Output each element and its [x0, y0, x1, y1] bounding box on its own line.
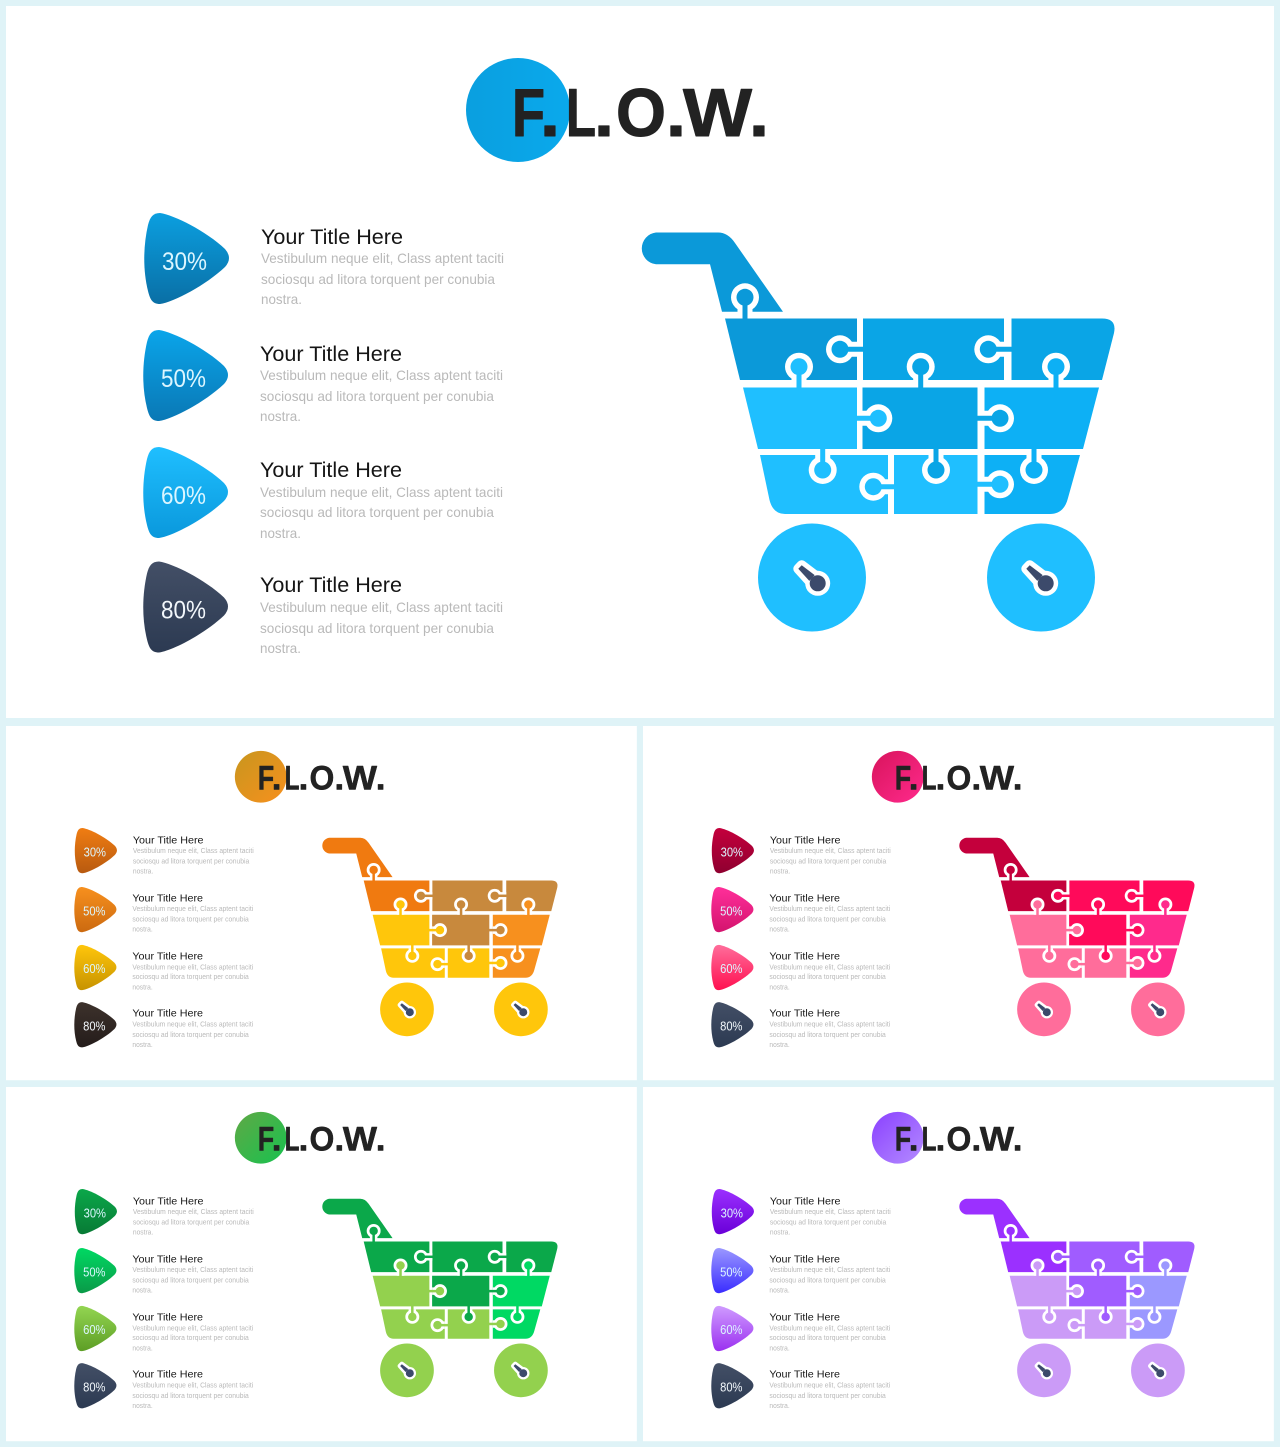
text block 4: sociosqu ad litora torquent per conubia — [769, 1032, 886, 1039]
badge 60% — [711, 1306, 753, 1351]
title: F.L.O.W.: . — [334, 760, 344, 798]
title: F.L.O.W.: W — [683, 75, 753, 151]
text block 2 — [132, 894, 254, 933]
title: F.L.O.W.: . — [376, 760, 386, 798]
list item 60% — [143, 447, 503, 541]
text block 3 — [769, 1312, 891, 1353]
text block 3: Your Title Here — [769, 951, 840, 962]
title: F.L.O.W.: . — [540, 75, 560, 151]
text block 1: Vestibulum neque elit, Class aptent taciti — [770, 1209, 891, 1216]
badge 30%: 30% — [84, 1206, 106, 1220]
title: F.L.O.W.: F — [512, 75, 545, 151]
badge 50% — [711, 887, 753, 932]
text block 4: Your Title Here — [260, 574, 402, 597]
text block 4: sociosqu ad litora torquent per conubia — [132, 1032, 249, 1039]
badge 50%: 50% — [720, 904, 743, 918]
title: F.L.O.W.: . — [936, 1121, 945, 1159]
title: F.L.O.W.: F — [895, 1121, 911, 1159]
title: F.L.O.W.: W — [343, 760, 377, 798]
badge 80% — [74, 1002, 116, 1047]
text block 1: sociosqu ad litora torquent per conubia — [261, 271, 495, 287]
text block 2: Your Title Here — [132, 1255, 203, 1266]
text block 4: Vestibulum neque elit, Class aptent taciti — [260, 599, 503, 615]
title: F.L.O.W.: W — [980, 760, 1014, 798]
text block 4: Vestibulum neque elit, Class aptent taciti — [132, 1382, 254, 1389]
badge 80% — [74, 1363, 116, 1408]
list item 30% — [144, 213, 504, 307]
text block 1: nostra. — [770, 868, 790, 875]
panel: blue main slide — [6, 6, 1274, 718]
text block 3: sociosqu ad litora torquent per conubia — [132, 974, 249, 981]
text block 4 — [769, 1370, 891, 1410]
text block 1 — [133, 1196, 254, 1236]
title: F.L.O.W.: . — [909, 760, 919, 798]
list item 80% — [143, 562, 503, 656]
text block 3: Your Title Here — [769, 1312, 840, 1323]
badge 30%: 30% — [721, 1206, 743, 1220]
text block 1: Your Title Here — [770, 835, 841, 846]
title: F.L.O.W.: . — [376, 1121, 386, 1159]
badge 80%: 80% — [83, 1380, 106, 1394]
text block 3: nostra. — [260, 525, 301, 541]
title: F.L.O.W.: . — [971, 1121, 981, 1159]
text block 2: Your Title Here — [260, 343, 402, 366]
title: F.L.O.W.: L — [285, 1121, 300, 1159]
title: F.L.O.W.: L — [566, 75, 596, 151]
text block 1: nostra. — [261, 291, 302, 307]
badge 80% — [143, 562, 228, 652]
text block 2: Vestibulum neque elit, Class aptent taciti — [260, 367, 503, 383]
text block 2: Vestibulum neque elit, Class aptent taciti — [769, 1267, 891, 1274]
text block 4: Your Title Here — [132, 1009, 203, 1020]
badge 50%: 50% — [161, 365, 206, 393]
text block 1: sociosqu ad litora torquent per conubia — [133, 858, 249, 865]
title: F.L.O.W.: F — [258, 760, 274, 798]
text block 4 — [132, 1009, 254, 1049]
title: F.L.O.W. — [872, 1112, 1023, 1164]
badge 50% — [711, 1248, 753, 1293]
title: F.L.O.W.: . — [299, 1121, 308, 1159]
text block 4: sociosqu ad litora torquent per conubia — [769, 1393, 886, 1400]
text block 2: Your Title Here — [769, 894, 840, 905]
badge 80% — [711, 1363, 753, 1408]
title: F.L.O.W. — [466, 58, 769, 162]
text block 2: sociosqu ad litora torquent per conubia — [769, 1278, 886, 1285]
text block 2: Your Title Here — [769, 1255, 840, 1266]
text block 1: sociosqu ad litora torquent per conubia — [133, 1219, 249, 1226]
text block 1: Vestibulum neque elit, Class aptent taciti — [133, 1209, 254, 1216]
left wheel — [758, 524, 866, 632]
title: F.L.O.W.: . — [666, 75, 686, 151]
text block 3: nostra. — [132, 985, 153, 992]
title: F.L.O.W.: . — [299, 760, 308, 798]
text block 2: sociosqu ad litora torquent per conubia — [132, 917, 249, 924]
text block 2: nostra. — [769, 1287, 790, 1294]
cart handle — [642, 232, 783, 312]
text block 4: nostra. — [769, 1403, 790, 1410]
right wheel — [987, 524, 1095, 632]
badge 30%: 30% — [84, 845, 106, 859]
badge 80%: 80% — [720, 1019, 743, 1033]
title: F.L.O.W.: O — [309, 760, 334, 798]
text block 3: sociosqu ad litora torquent per conubia — [260, 504, 494, 520]
title: F.L.O.W. — [235, 1112, 386, 1164]
list item 50% — [143, 330, 503, 424]
panel: purple slide — [643, 1087, 1274, 1441]
badge 80% — [711, 1002, 753, 1047]
text block 3: Vestibulum neque elit, Class aptent taciti — [132, 964, 254, 971]
text block 4 — [260, 574, 503, 656]
title: F.L.O.W.: F — [895, 760, 911, 798]
text block 4: sociosqu ad litora torquent per conubia — [260, 620, 494, 636]
title: F.L.O.W.: . — [334, 1121, 344, 1159]
badge 60% — [711, 945, 753, 990]
title: F.L.O.W. — [872, 751, 1023, 803]
badge 60%: 60% — [720, 962, 743, 976]
text block 3: sociosqu ad litora torquent per conubia — [132, 1335, 249, 1342]
text block 3: sociosqu ad litora torquent per conubia — [769, 1335, 886, 1342]
badge 60%: 60% — [83, 1323, 106, 1337]
text block 3: nostra. — [769, 985, 790, 992]
title: F.L.O.W.: L — [922, 1121, 937, 1159]
text block 2 — [769, 894, 891, 933]
text block 3: nostra. — [132, 1346, 153, 1353]
text block 3: sociosqu ad litora torquent per conubia — [769, 974, 886, 981]
text block 3 — [132, 1312, 254, 1353]
text block 1: nostra. — [133, 868, 153, 875]
badge 50% — [74, 887, 116, 932]
title: F.L.O.W.: O — [616, 75, 666, 151]
panel: pink slide — [643, 726, 1274, 1080]
text block 4: Your Title Here — [769, 1009, 840, 1020]
text block 1: sociosqu ad litora torquent per conubia — [770, 1219, 886, 1226]
text block 4: Vestibulum neque elit, Class aptent taciti — [132, 1021, 254, 1028]
puzzle tabs — [736, 289, 1064, 495]
text block 1: Your Title Here — [133, 1196, 204, 1207]
text block 1: nostra. — [770, 1229, 790, 1236]
text block 1: Your Title Here — [133, 835, 204, 846]
title: F.L.O.W.: . — [594, 75, 614, 151]
text block 2: Your Title Here — [132, 894, 203, 905]
title: F.L.O.W.: L — [285, 760, 300, 798]
text block 1: nostra. — [133, 1229, 153, 1236]
text block 2: sociosqu ad litora torquent per conubia — [769, 917, 886, 924]
text block 1: Your Title Here — [770, 1196, 841, 1207]
title: F.L.O.W.: . — [936, 760, 945, 798]
text block 3: Vestibulum neque elit, Class aptent taciti — [769, 1325, 891, 1332]
badge 50%: 50% — [720, 1265, 743, 1279]
text block 4: nostra. — [260, 640, 301, 656]
badge 60%: 60% — [720, 1323, 743, 1337]
title: F.L.O.W. — [235, 751, 386, 803]
puzzle shopping cart, green — [322, 1199, 557, 1397]
badge 30%: 30% — [162, 248, 207, 276]
badge 60%: 60% — [161, 482, 206, 510]
text block 1 — [133, 835, 254, 875]
title: F.L.O.W.: . — [1013, 760, 1023, 798]
title: F.L.O.W.: O — [309, 1121, 334, 1159]
title: F.L.O.W.: . — [909, 1121, 919, 1159]
text block 4: Vestibulum neque elit, Class aptent taciti — [769, 1382, 891, 1389]
puzzle shopping cart, pink — [959, 838, 1194, 1036]
badge 30% — [712, 1189, 754, 1234]
text block 3 — [769, 951, 891, 992]
text block 4: nostra. — [132, 1042, 153, 1049]
text block 4: nostra. — [769, 1042, 790, 1049]
text block 1 — [770, 835, 891, 875]
badge 50%: 50% — [83, 904, 106, 918]
text block 2: nostra. — [260, 408, 301, 424]
text block 2: Vestibulum neque elit, Class aptent taciti — [132, 906, 254, 913]
title: F.L.O.W.: . — [272, 760, 282, 798]
puzzle tab outlines — [731, 283, 1070, 501]
badge 30% — [75, 1189, 117, 1234]
text block 1: Vestibulum neque elit, Class aptent taciti — [261, 250, 504, 266]
badge 50% — [143, 330, 228, 421]
text block 3: Your Title Here — [260, 459, 402, 482]
title: F.L.O.W.: O — [946, 1121, 971, 1159]
text block 4: Your Title Here — [769, 1370, 840, 1381]
badge 60%: 60% — [83, 962, 106, 976]
text block 3: Vestibulum neque elit, Class aptent taciti — [260, 484, 503, 500]
badge 30% — [75, 828, 117, 873]
title: F.L.O.W.: . — [272, 1121, 282, 1159]
badge 30% — [712, 828, 754, 873]
badge 50% — [74, 1248, 116, 1293]
text block 4: sociosqu ad litora torquent per conubia — [132, 1393, 249, 1400]
puzzle shopping cart, purple — [959, 1199, 1194, 1397]
puzzle shopping cart, blue — [642, 232, 1114, 632]
title: F.L.O.W.: . — [1013, 1121, 1023, 1159]
text block 4: nostra. — [132, 1403, 153, 1410]
text block 2: sociosqu ad litora torquent per conubia — [132, 1278, 249, 1285]
badge 30%: 30% — [721, 845, 743, 859]
badge 60% — [74, 945, 116, 990]
text block 3: nostra. — [769, 1346, 790, 1353]
text block 3 — [260, 459, 503, 541]
text block 2 — [260, 343, 503, 424]
text block 3: Vestibulum neque elit, Class aptent taciti — [769, 964, 891, 971]
text block 3: Your Title Here — [132, 1312, 203, 1323]
text block 1: sociosqu ad litora torquent per conubia — [770, 858, 886, 865]
text block 2: sociosqu ad litora torquent per conubia — [260, 388, 494, 404]
text block 1: Your Title Here — [261, 226, 403, 249]
text block 2 — [769, 1255, 891, 1294]
badge 60% — [143, 447, 228, 538]
text block 4 — [132, 1370, 254, 1410]
text block 3 — [132, 951, 254, 992]
text block 4: Vestibulum neque elit, Class aptent taciti — [769, 1021, 891, 1028]
panel: green slide — [6, 1087, 637, 1441]
text block 2: Vestibulum neque elit, Class aptent taciti — [769, 906, 891, 913]
text block 1: Vestibulum neque elit, Class aptent taciti — [770, 848, 891, 855]
badge 30% — [144, 213, 229, 304]
badge 80%: 80% — [161, 596, 206, 624]
panel: orange slide — [6, 726, 637, 1080]
text block 2: nostra. — [769, 926, 790, 933]
text block 2: Vestibulum neque elit, Class aptent taciti — [132, 1267, 254, 1274]
text block 2 — [132, 1255, 254, 1294]
puzzle shopping cart, orange — [322, 838, 557, 1036]
title: F.L.O.W.: F — [258, 1121, 274, 1159]
badge 80%: 80% — [720, 1380, 743, 1394]
text block 4: Your Title Here — [132, 1370, 203, 1381]
text block 4 — [769, 1009, 891, 1049]
title: F.L.O.W.: W — [343, 1121, 377, 1159]
text block 3: Vestibulum neque elit, Class aptent taciti — [132, 1325, 254, 1332]
text block 1: Vestibulum neque elit, Class aptent taciti — [133, 848, 254, 855]
title: F.L.O.W.: W — [980, 1121, 1014, 1159]
title: F.L.O.W.: . — [749, 75, 769, 151]
badge 60% — [74, 1306, 116, 1351]
text block 1 — [770, 1196, 891, 1236]
text block 2: nostra. — [132, 926, 153, 933]
cart basket puzzle pieces — [725, 318, 1114, 514]
badge 50%: 50% — [83, 1265, 106, 1279]
text block 2: nostra. — [132, 1287, 153, 1294]
title: F.L.O.W.: L — [922, 760, 937, 798]
text block 1 — [261, 226, 504, 307]
badge 80%: 80% — [83, 1019, 106, 1033]
text block 3: Your Title Here — [132, 951, 203, 962]
title: F.L.O.W.: . — [971, 760, 981, 798]
title: F.L.O.W.: O — [946, 760, 971, 798]
